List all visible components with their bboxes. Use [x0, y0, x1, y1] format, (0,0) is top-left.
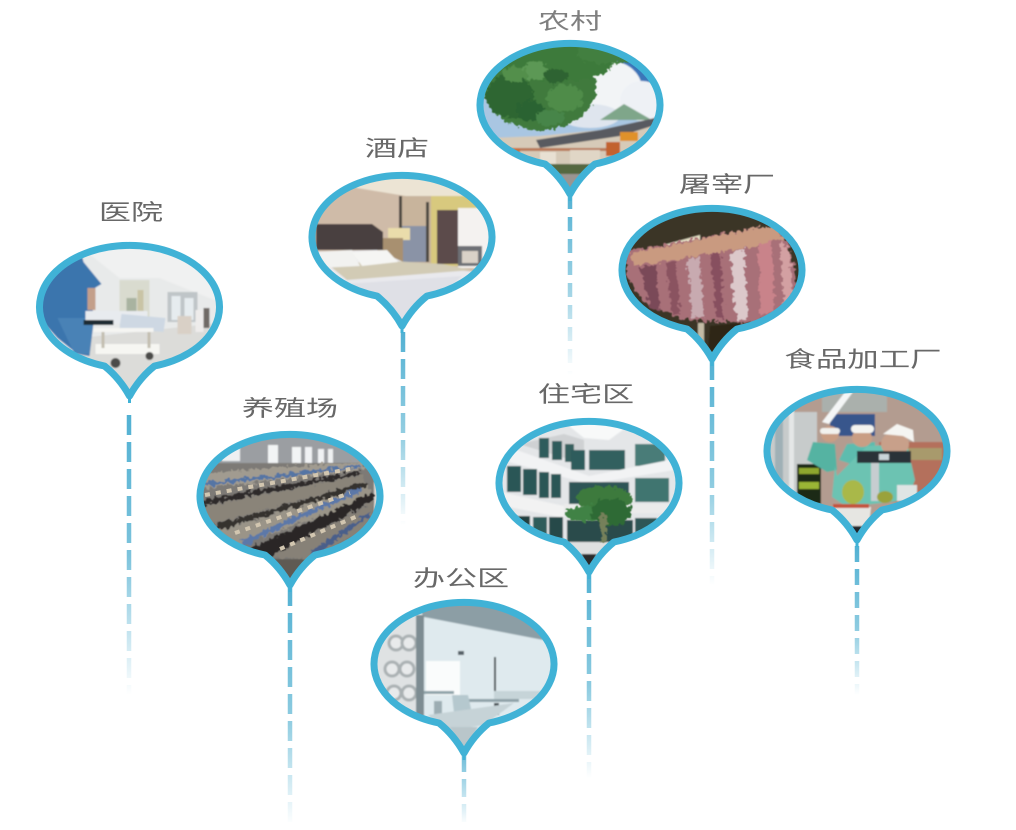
pin: hotel	[307, 136, 498, 525]
label: poultry farm: 养殖场	[242, 396, 338, 421]
pin: office area	[369, 566, 559, 825]
pin: poultry farm	[195, 396, 386, 825]
label: hotel: 酒店	[365, 136, 429, 161]
label: office area: 办公区	[413, 566, 509, 591]
label: slaughterhouse: 屠宰厂	[679, 172, 775, 197]
photo and outline: hotel	[307, 173, 498, 333]
label: residential area: 住宅区	[538, 382, 634, 407]
pin: food factory	[762, 347, 954, 695]
photo and outline: office area	[369, 600, 559, 760]
photo and outline: rural village	[475, 41, 665, 201]
dashed line: slaughterhouse	[710, 360, 714, 585]
pin: slaughterhouse	[617, 172, 807, 585]
photo and outline: poultry farm	[195, 432, 386, 592]
pin: rural village	[475, 9, 665, 375]
dashed line: hospital	[127, 415, 131, 695]
dashed line: office area	[462, 754, 466, 825]
label: rural village: 农村	[538, 9, 602, 34]
dashed line: rural village	[568, 195, 572, 375]
label: food factory: 食品加工厂	[784, 347, 942, 372]
photo and outline: slaughterhouse	[617, 206, 807, 366]
dashed line: hotel	[401, 332, 405, 525]
label: hospital: 医院	[99, 200, 163, 225]
pin: hospital	[34, 200, 224, 695]
photo and outline: residential area	[494, 419, 684, 579]
dashed line: food factory	[855, 546, 859, 695]
dashed line: poultry farm	[288, 586, 292, 825]
photo and outline: hospital	[34, 243, 224, 403]
dashed line: residential area	[587, 573, 591, 778]
photo and outline: food factory	[762, 387, 954, 547]
pin: residential area	[494, 382, 684, 778]
